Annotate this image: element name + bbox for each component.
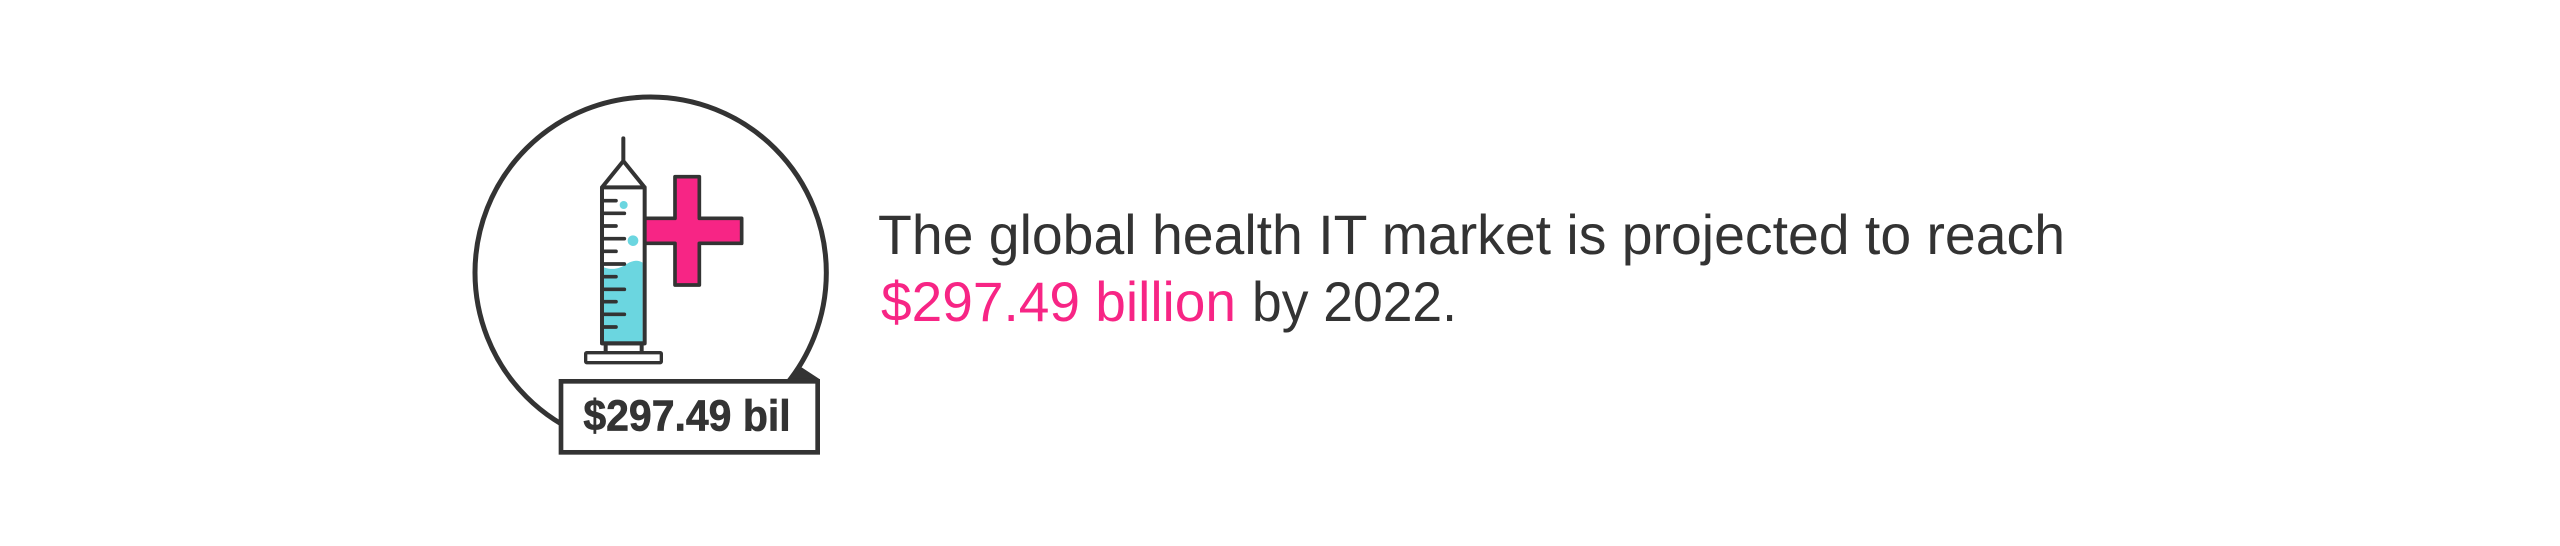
- icon: syringe: [586, 138, 661, 363]
- icon: syringe and cross in circle with value label: [475, 97, 826, 452]
- statement text: [878, 203, 2065, 333]
- label corner fold: [787, 367, 820, 383]
- value label: $297.49 bil: [583, 393, 791, 441]
- circle outline: [475, 97, 826, 448]
- line 1: The global health IT market is projected to reach: [878, 203, 2065, 266]
- line 2 remainder: by 2022.: [1252, 270, 1457, 333]
- icon: medical cross: [645, 177, 742, 285]
- value label: [561, 381, 818, 452]
- line 2 highlight: $297.49 billion: [881, 270, 1236, 333]
